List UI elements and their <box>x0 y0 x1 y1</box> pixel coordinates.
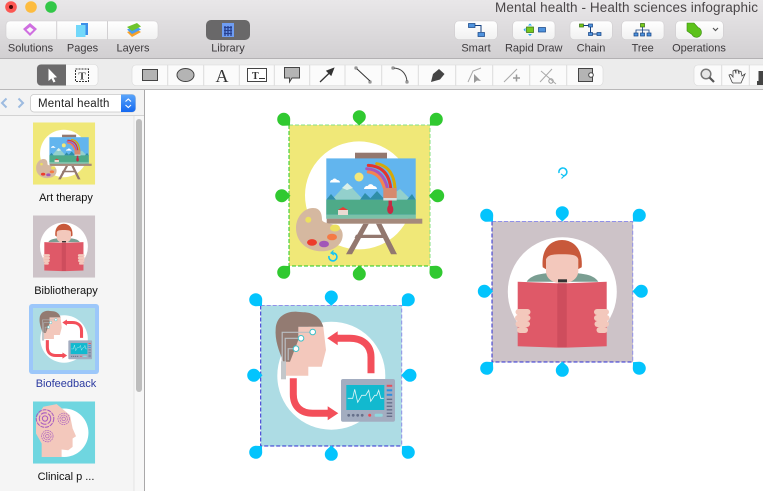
button: smart: Smart <box>461 42 491 54</box>
drawing tools bar <box>0 59 763 90</box>
selection handles <box>247 291 417 461</box>
panel: library sidebar <box>0 90 145 491</box>
selection outline <box>492 222 633 362</box>
tool group: zoom, hand, stamp <box>694 65 763 86</box>
button: chain: Chain <box>577 42 605 54</box>
library item: art therapy <box>33 122 95 204</box>
labels: solutions, pages, layers: Pages <box>67 42 99 54</box>
selected shape: biofeedback <box>247 291 417 461</box>
segmented control: solutions, pages, layers <box>6 21 158 40</box>
button: library: Library <box>211 42 245 54</box>
window controls <box>5 1 57 13</box>
scrollbar <box>134 116 144 491</box>
library item: biofeedback selected: Biofeedback <box>36 378 97 390</box>
library item: bibliotherapy <box>33 216 98 297</box>
selection handles <box>275 110 445 281</box>
button: smart <box>455 21 497 54</box>
button: tree: Tree <box>632 42 654 54</box>
button: operations: Operations <box>672 42 726 54</box>
library item: bibliotherapy: Bibliotherapy <box>34 285 98 297</box>
rotation handle <box>559 168 567 178</box>
button: operations <box>672 21 726 54</box>
tool group: select and text select: T <box>78 70 86 82</box>
button: tree <box>622 21 664 54</box>
window title: Mental health - Health sciences infographic <box>495 0 758 15</box>
rotation handle <box>329 250 337 261</box>
labels: solutions, pages, layers: Solutions <box>8 42 54 54</box>
tool group: shapes and lines <box>132 65 603 86</box>
labels: solutions, pages, layers <box>8 42 150 54</box>
tool group: shapes and lines: A <box>216 66 228 86</box>
selection outline <box>289 125 430 266</box>
button: library <box>206 20 250 54</box>
library item: clinical psychology: Clinical p ... <box>38 471 94 483</box>
tool group: shapes and lines: T <box>252 71 259 82</box>
icon: layers <box>127 23 141 37</box>
labels: solutions, pages, layers: Layers <box>116 42 150 54</box>
icon: pages <box>76 23 88 37</box>
button: rapid draw <box>505 21 562 54</box>
button: rapid draw: Rapid Draw <box>505 42 562 54</box>
top toolbar <box>0 0 763 59</box>
tool group: select and text select <box>37 64 98 86</box>
library item: clinical psychology <box>33 402 95 483</box>
library item: biofeedback selected <box>29 304 99 390</box>
icon: solutions <box>23 23 37 36</box>
selected shape: art therapy <box>275 110 445 281</box>
library item: art therapy: Art therapy <box>39 192 93 204</box>
selected shape: bibliotherapy <box>478 168 648 377</box>
button: chain <box>570 21 612 54</box>
selection handles <box>478 206 648 377</box>
library navigation bar <box>0 90 144 116</box>
selection outline <box>261 306 402 446</box>
library navigation bar: Mental health <box>38 98 110 110</box>
